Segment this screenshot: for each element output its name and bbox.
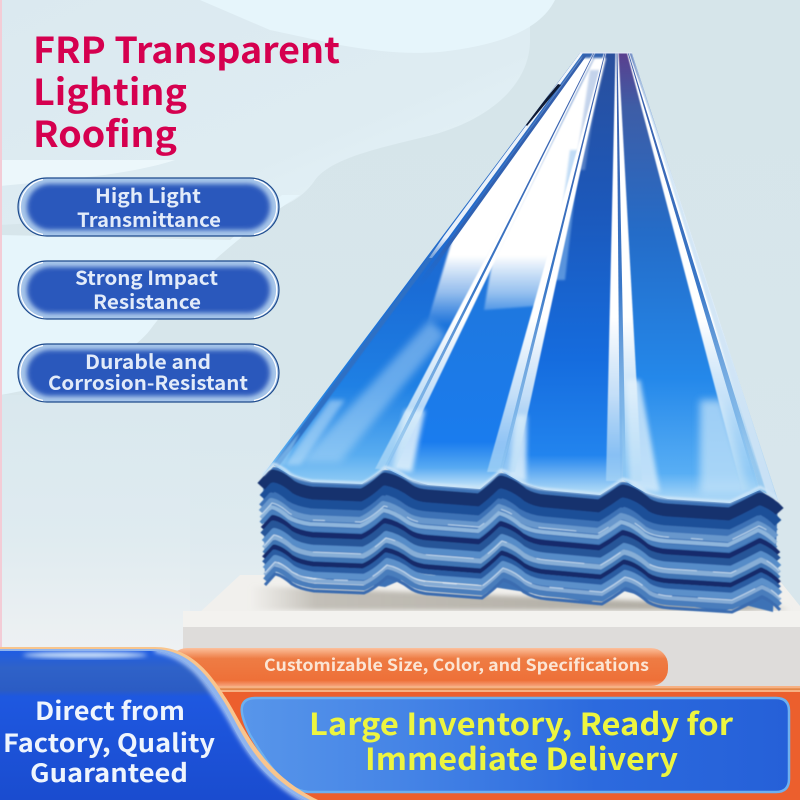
feature pill: durable and corrosion-resistant: Durable and — [85, 346, 211, 375]
outer edges — [631, 53, 778, 500]
feature pill: durable and corrosion-resistant — [18, 344, 279, 402]
panel: large inventory — [242, 698, 789, 792]
product: stacked FRP roofing sheets — [255, 52, 782, 612]
panel: large inventory: Immediate Delivery — [365, 735, 679, 779]
feature pill: high light transmittance — [18, 178, 279, 236]
white glare upper panels — [428, 56, 595, 322]
feature pill: high light transmittance: Transmittance — [77, 204, 221, 233]
orange banner base — [180, 686, 800, 800]
title — [33, 22, 340, 158]
pill: customizable options — [170, 648, 668, 686]
title: FRP Transparent — [33, 22, 340, 74]
top sheet surface — [255, 53, 782, 515]
title: Lighting — [33, 64, 187, 116]
panel: direct from factory — [0, 647, 318, 800]
rib centre lines — [383, 53, 594, 469]
feature pill: durable and corrosion-resistant: Corrosion-Resistant — [48, 367, 248, 396]
roof ribs — [375, 53, 595, 469]
display platform — [183, 575, 800, 697]
panel: large inventory: Large Inventory, Ready for — [309, 700, 734, 744]
sheet front lip highlight — [263, 464, 778, 502]
panel: direct from factory: Direct from — [35, 692, 185, 728]
pill: customizable options: Customizable Size, Color, and Specifications — [264, 652, 649, 676]
title: Roofing — [33, 106, 177, 158]
feature pill: strong impact resistance: Strong Impact — [75, 262, 218, 291]
feature pill: high light transmittance: High Light — [95, 180, 201, 209]
panel: direct from factory: Guaranteed — [30, 754, 188, 790]
feature pill: strong impact resistance — [18, 261, 279, 319]
feature pill: strong impact resistance: Resistance — [93, 286, 201, 315]
top edge of the sheets — [580, 52, 632, 54]
panel: direct from factory: Factory, Quality — [3, 724, 216, 760]
soft lower panel glare — [300, 320, 445, 462]
sheet stack front edge — [261, 467, 780, 612]
